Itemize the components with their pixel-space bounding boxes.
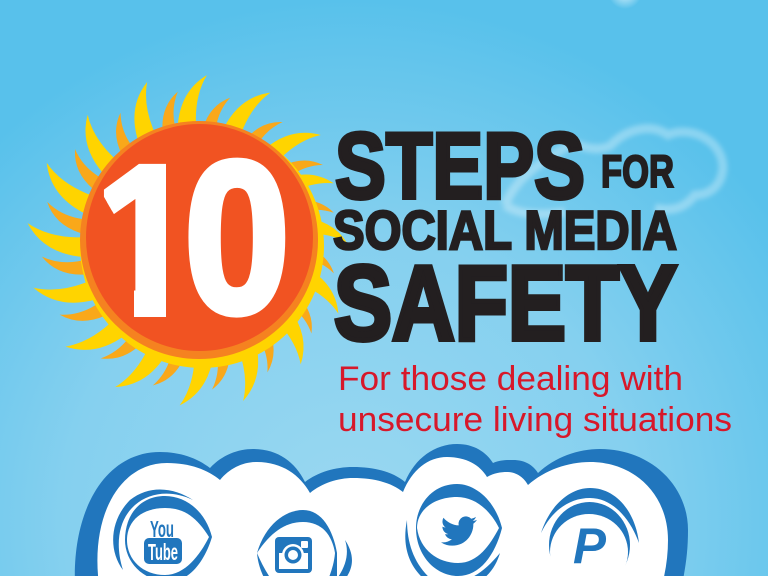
sun rays	[25, 74, 350, 409]
icon: Twitter eye	[405, 484, 502, 576]
icon: Instagram eye	[257, 510, 352, 576]
title: SAFETY	[334, 244, 677, 362]
number 10: 0	[184, 116, 290, 358]
icon: YouTube eye	[113, 489, 212, 576]
cloud outline	[75, 444, 688, 576]
title	[333, 113, 677, 362]
faint cloud behind title	[505, 129, 723, 214]
sun with number 10	[25, 74, 350, 409]
small light patch at top edge	[605, 0, 645, 10]
icon: YouTube eye: Tube	[148, 539, 178, 565]
social media cloud	[75, 444, 688, 576]
icon: PayPal eye	[541, 488, 639, 576]
number 10	[104, 158, 286, 318]
title: SOCIAL MEDIA	[333, 199, 677, 261]
subtitle: For those dealing with	[338, 360, 683, 398]
title: STEPS	[335, 113, 585, 218]
title: FOR	[601, 146, 674, 197]
icon: YouTube eye: You	[150, 516, 174, 542]
icon: PayPal eye: P	[573, 518, 607, 574]
cloud fill	[97, 457, 668, 576]
subtitle: unsecure living situations	[338, 401, 732, 439]
sun disc	[80, 121, 324, 368]
number 10: 1	[94, 120, 200, 362]
subtitle	[338, 360, 732, 439]
